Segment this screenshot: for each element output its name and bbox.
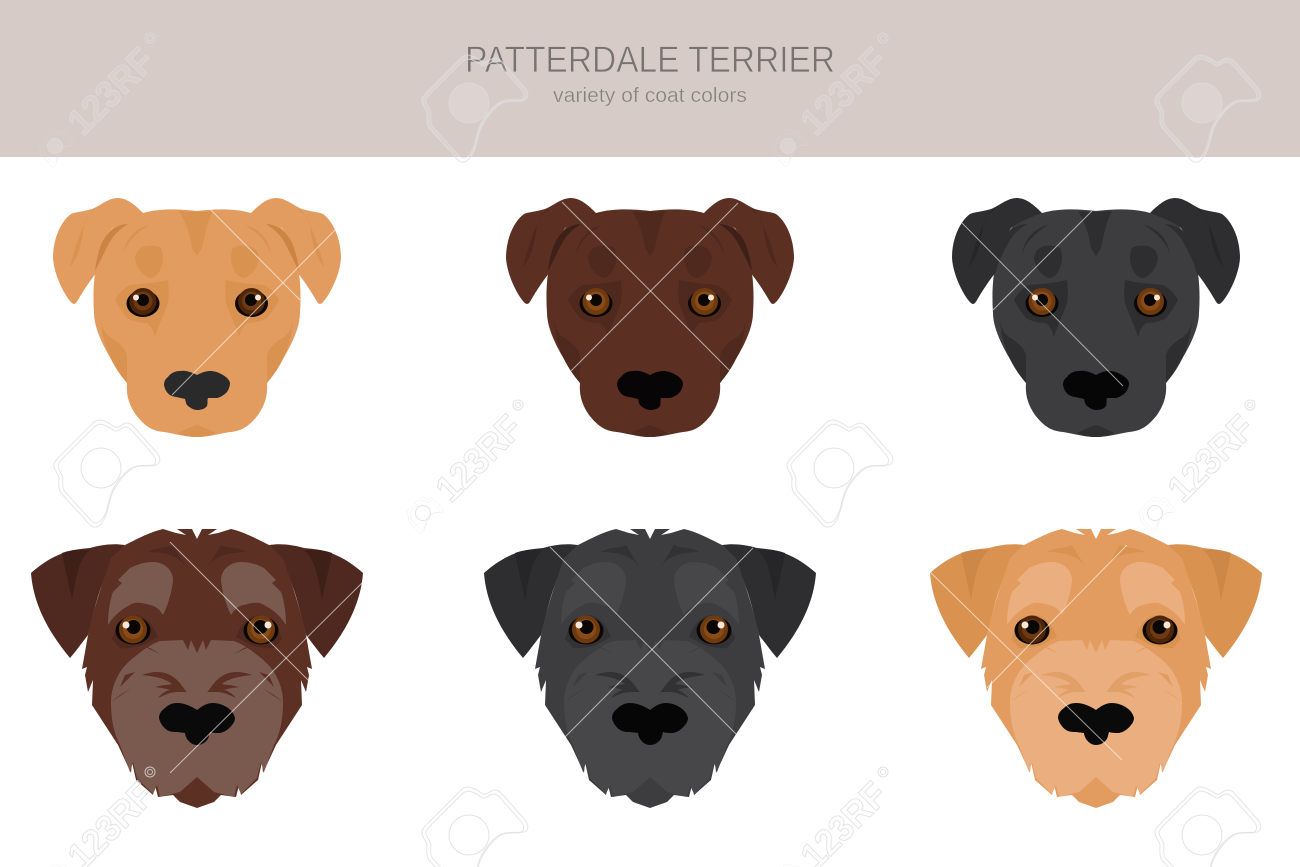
dog face: smooth black coat [952, 198, 1240, 437]
watermark wordmarks: 123RF [793, 40, 895, 143]
nose [1058, 703, 1134, 745]
ears [930, 544, 1262, 658]
ears [53, 198, 341, 304]
muzzle [564, 640, 736, 797]
dog face: wire-haired black coat [484, 529, 816, 808]
nose [159, 703, 235, 745]
head [82, 529, 312, 808]
eyes [126, 288, 268, 317]
muzzle [1010, 640, 1182, 797]
watermark wordmarks: 123RF [1160, 407, 1262, 510]
eyes [1026, 288, 1167, 317]
shaded markings [1000, 211, 1192, 437]
watermark wordmarks: 123RF [60, 40, 162, 143]
brow and muzzle markings [561, 545, 739, 702]
header banner [0, 0, 1300, 157]
head [546, 209, 754, 437]
eyes [580, 288, 721, 317]
dog face: smooth ginger coat [53, 198, 341, 437]
nose [164, 371, 230, 410]
nose [1063, 371, 1129, 410]
shaded markings [554, 211, 746, 437]
watermark wordmarks: 123RF [428, 407, 530, 510]
eyes [116, 616, 278, 644]
head [535, 529, 765, 808]
watermark diagonal lines [170, 202, 1127, 773]
dog face: smooth chocolate coat [506, 198, 794, 437]
ears [31, 544, 363, 658]
head [93, 209, 301, 437]
dog face: wire-haired ginger coat [930, 529, 1262, 808]
nose [612, 703, 688, 745]
shaded markings [101, 211, 293, 437]
head [981, 529, 1211, 808]
eyes [568, 616, 732, 644]
brow and muzzle markings [108, 545, 286, 702]
ears [506, 198, 794, 304]
subtitle: variety of coat colors [553, 85, 747, 107]
muzzle [111, 640, 283, 797]
title: PATTERDALE TERRIER [465, 39, 835, 80]
dog face: wire-haired brown coat [31, 529, 363, 808]
nose [617, 371, 683, 410]
ears [952, 198, 1240, 304]
brow and muzzle markings [1007, 545, 1185, 702]
ears [484, 544, 816, 658]
head [992, 209, 1200, 437]
eyes [1014, 616, 1178, 644]
